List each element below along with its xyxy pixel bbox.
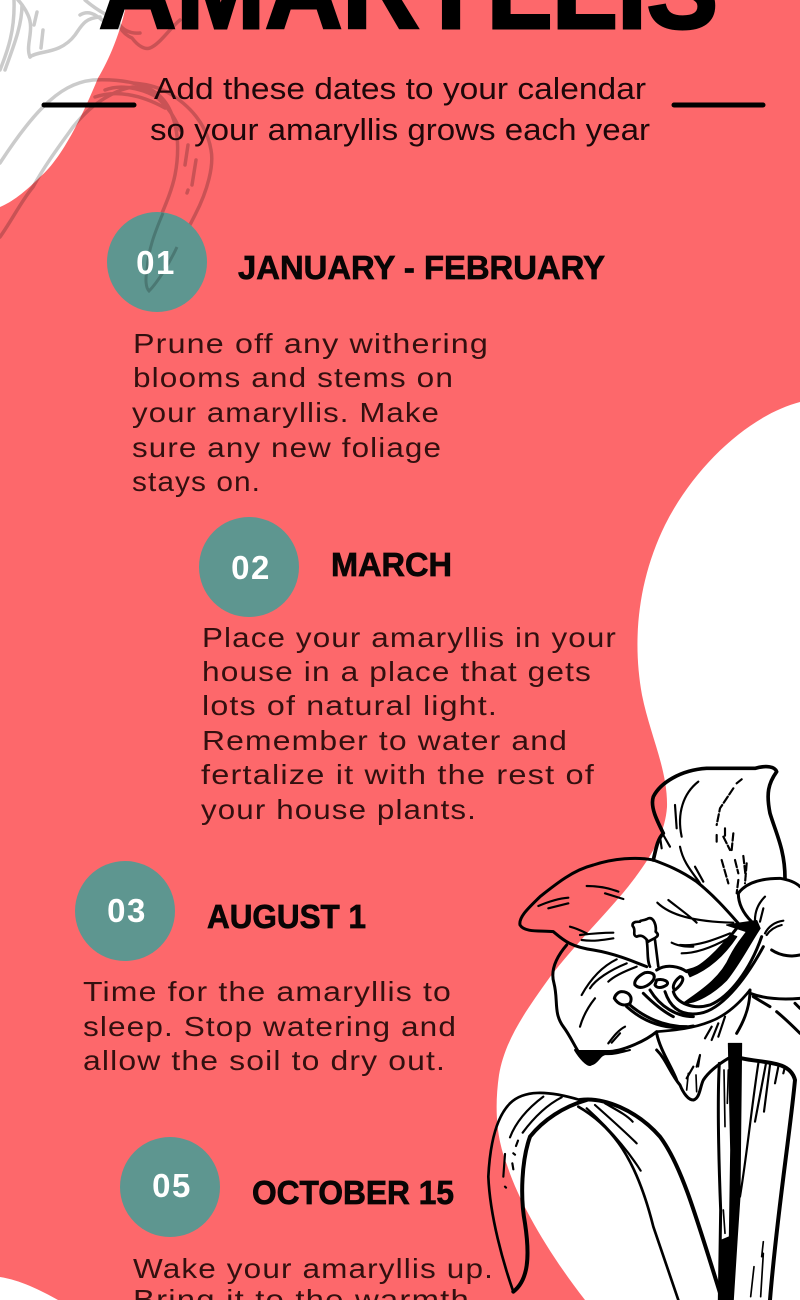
step 02: Place your amaryllis in your <box>202 622 617 653</box>
step 01: JANUARY - FEBRUARY <box>238 249 605 286</box>
step 01: stays on. <box>132 466 261 497</box>
step 02: house in a place that gets <box>202 656 592 687</box>
step 03: AUGUST 1 <box>207 898 366 935</box>
step 05 <box>120 1137 494 1300</box>
step 05: OCTOBER 15 <box>252 1174 454 1211</box>
step 05: 05 <box>152 1167 192 1204</box>
subtitle: Add these dates to your calendar <box>154 71 646 106</box>
amaryllis flower illustration <box>520 767 800 1080</box>
step 02: Remember to water and <box>202 725 568 756</box>
step 02: fertalize it with the rest of <box>201 759 595 790</box>
step 02: lots of natural light. <box>202 690 498 721</box>
step 02: your house plants. <box>201 794 477 825</box>
step 03: sleep. Stop watering and <box>83 1011 457 1042</box>
subtitle: so your amaryllis grows each year <box>150 112 650 147</box>
step 01: Prune off any withering <box>133 328 489 359</box>
step 03: allow the soil to dry out. <box>83 1045 446 1076</box>
step 05: Wake your amaryllis up. <box>133 1253 494 1284</box>
step 03: 03 <box>107 892 147 929</box>
step 01: blooms and stems on <box>133 362 454 393</box>
step 01: your amaryllis. Make <box>132 397 440 428</box>
step 02: MARCH <box>331 546 452 583</box>
white blob: top left <box>0 0 127 207</box>
step 02: 02 <box>231 549 271 586</box>
step 01: sure any new foliage <box>132 432 442 463</box>
subtitle <box>150 71 650 147</box>
amaryllis leaf and stem illustration <box>488 1043 795 1300</box>
step 01: 01 <box>136 244 176 281</box>
step 03: Time for the amaryllis to <box>83 976 452 1007</box>
step 03 <box>75 861 457 1076</box>
faded flower illustration: top left <box>0 0 212 290</box>
white blob: bottom left <box>0 1277 58 1300</box>
subtitle rule: left <box>44 102 134 108</box>
step 01 <box>107 212 605 497</box>
white blob: right side <box>497 402 800 1300</box>
step 02 <box>199 517 617 825</box>
subtitle rule: right <box>674 102 763 108</box>
